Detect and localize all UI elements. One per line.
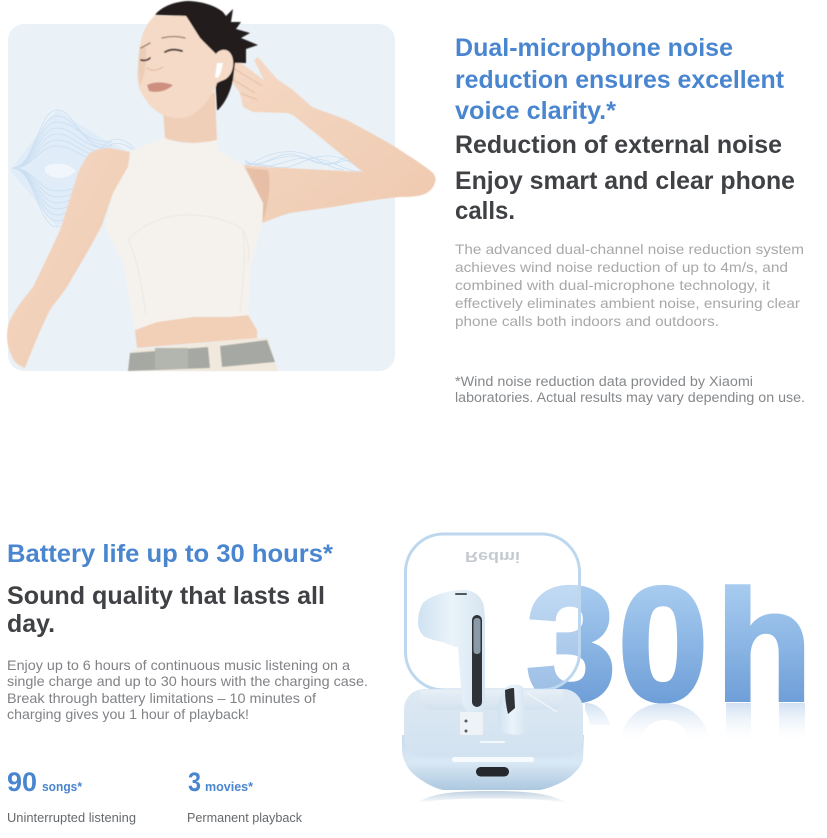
subheading: reduction of external noise: Enjoy smart and clear phone xyxy=(455,167,795,195)
case bottom xyxy=(402,735,584,790)
face xyxy=(137,15,233,118)
heading: dual-microphone noise reduction: Dual-microphone noise xyxy=(455,34,733,62)
case lid xyxy=(406,534,580,690)
stat: 3 movies: Permanent playback xyxy=(187,810,302,825)
panel background xyxy=(8,24,395,371)
case indicator xyxy=(480,741,505,743)
body text: battery details: Break through battery limitations – 10 minutes of xyxy=(7,690,316,706)
raised right arm and hand xyxy=(227,57,436,223)
sleeveless white top xyxy=(105,137,263,330)
footnote: wind noise data: laboratories. Actual results may vary depending on use. xyxy=(455,390,805,405)
sound waves xyxy=(10,110,366,227)
left earbud xyxy=(418,590,485,712)
body text: noise reduction system: effectively eliminates ambient noise, ensuring clear xyxy=(455,295,800,311)
subheading: sound quality: Sound quality that lasts all xyxy=(7,582,325,610)
stat: 3 movies: movies* xyxy=(205,780,253,794)
body text: battery details: charging gives you 1 hour of playback! xyxy=(7,706,249,722)
face shading xyxy=(138,46,146,85)
stat: 90 songs xyxy=(7,767,136,825)
footnote: wind noise data: *Wind noise reduction data provided by Xiaomi xyxy=(455,374,753,389)
heading: dual-microphone noise reduction: reduction ensures excellent xyxy=(455,66,785,94)
USB-C port xyxy=(476,767,509,776)
stat: 90 songs: songs* xyxy=(42,780,82,794)
large 30h graphic: 30 xyxy=(526,554,708,735)
body text: battery details: single charge and up to 30 hours with the charging case. xyxy=(7,673,368,689)
hair xyxy=(155,1,258,110)
trousers xyxy=(127,338,278,371)
mirrored Redmi logo: Redmi xyxy=(465,548,520,565)
body text: noise reduction system: achieves wind noise reduction of up to 4m/s, and xyxy=(455,259,788,275)
midriff xyxy=(135,315,257,348)
body text: noise reduction system: phone calls both indoors and outdoors. xyxy=(455,313,719,329)
body text: noise reduction system xyxy=(455,241,804,329)
left arm xyxy=(7,148,130,368)
photo panel: woman wearing earbuds xyxy=(7,1,436,371)
subheading: sound quality xyxy=(7,582,325,638)
right earbud xyxy=(498,685,557,735)
heading: battery life: Battery life up to 30 hours* xyxy=(7,540,333,568)
earbud in ear xyxy=(215,63,223,78)
heading: dual-microphone noise reduction: voice clarity.* xyxy=(455,97,616,125)
subheading: reduction of external noise: calls. xyxy=(455,197,515,225)
facial features xyxy=(141,36,185,92)
stat: 90 songs: Uninterrupted listening xyxy=(7,810,136,825)
subheading: sound quality: day. xyxy=(7,610,55,638)
left earbud post xyxy=(460,712,483,735)
body text: battery details: Enjoy up to 6 hours of continuous music listening on a xyxy=(7,657,350,673)
body text: noise reduction system: The advanced dual-channel noise reduction system xyxy=(455,241,804,257)
person xyxy=(7,1,436,371)
large 30h graphic: h xyxy=(716,559,812,734)
heading: dual-microphone noise reduction xyxy=(455,34,785,125)
case top shell xyxy=(404,689,583,757)
case floor shadow xyxy=(417,791,567,803)
studded belt xyxy=(128,340,275,371)
finger gaps xyxy=(229,68,262,100)
footnote: wind noise data xyxy=(455,374,805,405)
subheading: reduction of external noise xyxy=(455,131,795,225)
armpit shading xyxy=(246,168,270,222)
case light strip xyxy=(452,757,534,762)
stat: 3 movies xyxy=(187,767,302,825)
top seams xyxy=(128,215,249,315)
body text: noise reduction system: combined with dual-microphone technology, it xyxy=(455,277,770,293)
stat: 3 movies: 3 xyxy=(188,767,201,797)
stat: 90 songs: 90 xyxy=(7,767,37,797)
body text: battery details xyxy=(7,657,368,722)
product: earbuds charging case xyxy=(402,534,584,803)
case inner well xyxy=(420,690,563,710)
subheading: reduction of external noise: Reduction of external noise xyxy=(455,131,782,159)
neck xyxy=(163,92,217,143)
large 30h graphic xyxy=(526,554,812,745)
30h reflection xyxy=(585,703,805,745)
